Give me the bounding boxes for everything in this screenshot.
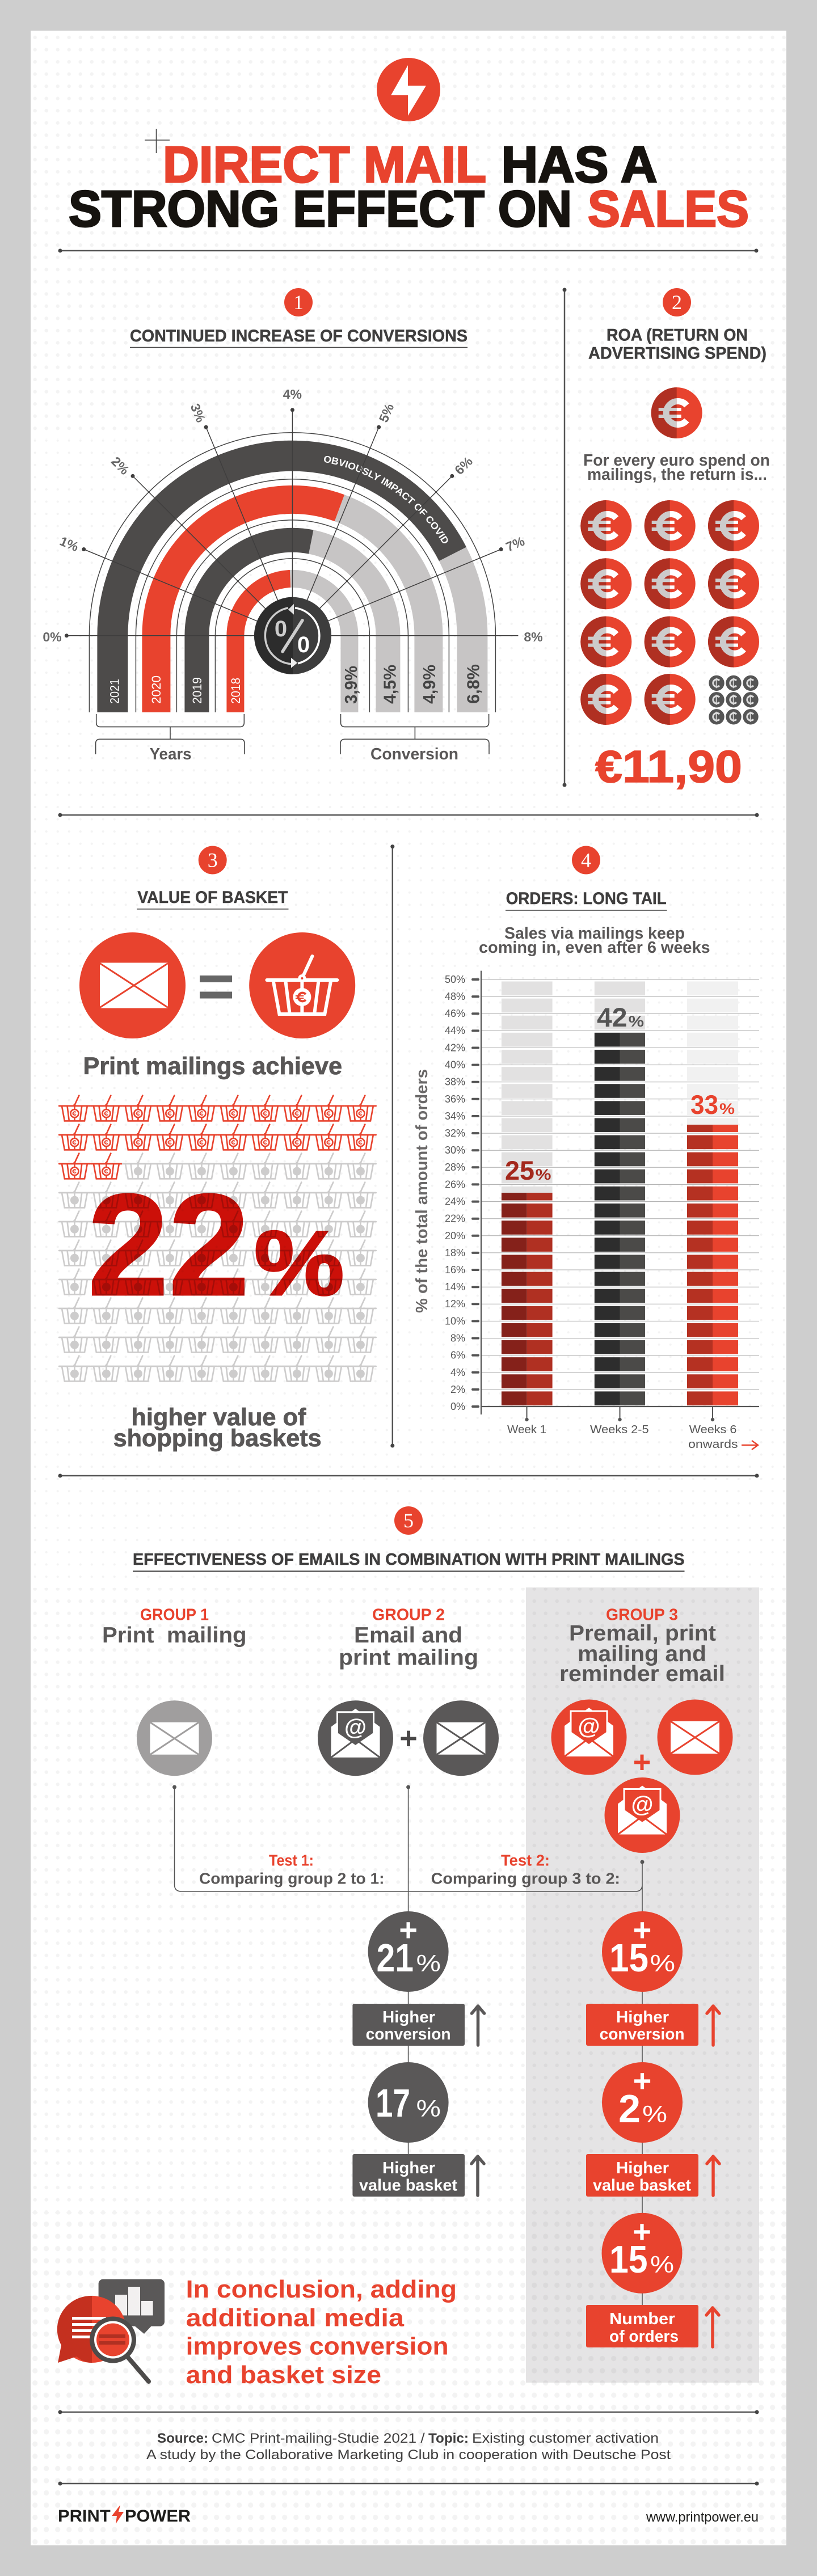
source text: A study by the Collaborative Marketing Club in cooperation with Deutsche Post: [146, 2447, 671, 2463]
test 2 label: Comparing group 3 to 2:: [431, 1870, 620, 1887]
y axis labels: 32%: [445, 1127, 465, 1139]
badge 1: [284, 288, 313, 316]
badge 4: 4: [581, 848, 591, 871]
y axis labels: 48%: [445, 991, 465, 1002]
box: higher value basket: Higher: [382, 2159, 435, 2177]
axes: [481, 971, 759, 1414]
y axis labels: 26%: [445, 1179, 465, 1190]
badge 5: 5: [403, 1509, 414, 1532]
heading: ROA: ROA (RETURN ON: [607, 326, 748, 345]
value label: 42%: %: [629, 1013, 644, 1030]
source text: Existing customer activation: [472, 2431, 659, 2446]
box: higher conversion: [586, 2004, 698, 2046]
conversion values: 3,9%: [341, 666, 361, 704]
test 2 label: [431, 1851, 620, 1887]
y axis labels: 38%: [445, 1076, 465, 1088]
title: print mailing: [339, 1646, 478, 1670]
source text: [146, 2431, 671, 2463]
year labels: 2021: [108, 679, 122, 704]
y axis labels: 18%: [445, 1247, 465, 1259]
logo: print power: POWER: [125, 2507, 191, 2526]
chart: bar chart: [445, 971, 759, 1451]
group 3: [551, 1606, 733, 1853]
value: 22 percent: 22: [88, 1164, 250, 1326]
y axis labels: 28%: [445, 1162, 465, 1173]
text: sales via mailings: Sales via mailings keep: [504, 924, 685, 943]
panel: section 3 value of basket: [59, 846, 376, 1452]
value label: 25%: [505, 1155, 551, 1185]
box: number of orders: [586, 2305, 698, 2347]
y axis labels: 46%: [445, 1008, 465, 1019]
year labels: 2018: [229, 678, 243, 704]
band 2018: [235, 578, 290, 712]
badge 4: [572, 846, 600, 875]
box: higher value basket: value basket: [593, 2177, 691, 2195]
box: number of orders: of orders: [609, 2328, 679, 2346]
curved covid note: OBVIOUSLY IMPACT OF COVID: [324, 456, 448, 543]
url: www.printpower.eu: [646, 2510, 759, 2525]
bar: week 1 25%: [502, 1193, 553, 1407]
result: plus 21%: 21: [377, 1936, 414, 1980]
arrow up: [472, 2006, 485, 2045]
value: 22 percent: %: [254, 1212, 344, 1315]
title: Email and: [354, 1623, 462, 1648]
bracket: conversion: [340, 714, 489, 763]
title: DIRECT MAIL: [163, 137, 486, 193]
result: 17%: %: [416, 2095, 441, 2122]
text: sales via mailings: [479, 924, 710, 957]
percent scale labels: 1%: [58, 534, 81, 554]
y axis labels: 24%: [445, 1196, 465, 1207]
band 2019: [197, 540, 311, 712]
percent scale labels: 6%: [452, 454, 475, 478]
heading: ROA: ADVERTISING SPEND): [588, 344, 767, 363]
hub icon: percent cycle: 0: [297, 632, 310, 657]
arrow: onwards: [742, 1441, 758, 1450]
title: [69, 137, 749, 238]
x labels: Week 1: [507, 1424, 546, 1436]
x labels: Weeks 6: [689, 1424, 736, 1436]
y axis labels: 4%: [450, 1367, 465, 1378]
label: GROUP 1: [140, 1606, 209, 1624]
box: higher conversion: Higher: [616, 2008, 669, 2026]
icon: print mail: [657, 1699, 733, 1775]
y axis labels: 36%: [445, 1093, 465, 1105]
icon: conclusion chat and magnifier: [57, 2279, 165, 2381]
divider: [58, 248, 758, 253]
result: plus 2%: 2: [618, 2087, 641, 2131]
text: every euro: [583, 451, 770, 484]
test 1 label: Comparing group 2 to 1:: [199, 1870, 385, 1887]
percent scale labels: 8%: [524, 630, 543, 644]
box: higher conversion: conversion: [600, 2025, 685, 2043]
hub icon: percent cycle: [254, 597, 331, 674]
heading: value of basket: VALUE OF BASKET: [137, 888, 288, 907]
result: plus 21%: [368, 1911, 449, 1992]
panel: section 4 orders long tail: [413, 846, 759, 1451]
badge 2: [663, 288, 691, 316]
y axis labels: 34%: [445, 1110, 465, 1122]
divider: [58, 2410, 759, 2414]
result: plus 15% orders: %: [650, 2251, 674, 2278]
text: higher value: shopping baskets: [113, 1425, 322, 1452]
badge 5: [394, 1506, 423, 1535]
title: mailing and: [578, 1642, 706, 1666]
title: Print mailing: [102, 1623, 247, 1648]
label: GROUP 3: [606, 1606, 678, 1624]
conversion values: 4,5%: [380, 665, 399, 704]
source text: Topic:: [428, 2431, 469, 2446]
box: higher value basket: [352, 2154, 465, 2197]
value label: 25%: 25: [505, 1155, 534, 1185]
title: [559, 1621, 725, 1686]
vertical divider 1: [563, 288, 566, 787]
bracket: years: Years: [150, 745, 192, 763]
title: [339, 1623, 478, 1670]
y axis labels: 44%: [445, 1025, 465, 1036]
icon grid: 100 baskets, 22 highlighted: [59, 1096, 376, 1381]
x ticks: [525, 1407, 714, 1421]
value label: 42%: [597, 1002, 644, 1032]
result: plus 15%: %: [650, 1950, 675, 1977]
result: plus 21%: %: [416, 1950, 441, 1977]
bar: weeks 2-5 42%: [595, 1031, 645, 1407]
x labels: [507, 1424, 738, 1451]
icon: envelope circle: [79, 932, 186, 1038]
y axis labels: 20%: [445, 1230, 465, 1241]
result: plus 2%: %: [642, 2101, 667, 2127]
bars: [502, 979, 738, 1407]
source text: CMC Print-mailing-Studie 2021 /: [212, 2431, 425, 2446]
y axis labels: 10%: [445, 1316, 465, 1327]
icon: print mail: [137, 1700, 212, 1776]
conclusion text: improves conversion: [186, 2333, 449, 2360]
year labels: [108, 675, 243, 704]
conversion values: 4,9%: [419, 665, 439, 704]
result: plus 15% orders: 15: [609, 2238, 648, 2281]
panel: group 3 background: [526, 1587, 759, 2383]
arrow up: [707, 2006, 719, 2045]
y axis labels: 12%: [445, 1298, 465, 1310]
divider: [58, 2482, 759, 2485]
icon grid: 9 cent coins: [709, 675, 759, 725]
title: Premail, print: [569, 1621, 716, 1646]
divider: [58, 1473, 759, 1478]
band 2021: [112, 456, 453, 712]
title: STRONG EFFECT ON: [69, 181, 572, 238]
panel: section 1 conversions gauge: [43, 288, 543, 763]
y axis labels: 8%: [450, 1333, 465, 1344]
axis title: % of the total amount of orders: [413, 1069, 431, 1313]
y axis labels: 30%: [445, 1145, 465, 1156]
year labels: 2019: [190, 677, 204, 704]
plus: +: [399, 1721, 418, 1755]
y axis labels: [445, 974, 465, 1412]
divider: [58, 813, 759, 817]
x labels: onwards: [688, 1438, 738, 1451]
result: plus 15% orders: +: [633, 2214, 651, 2249]
spokes: [65, 408, 518, 637]
value label: 42%: 42: [597, 1002, 628, 1032]
plus: +: [633, 1745, 651, 1779]
percent scale labels: [43, 387, 543, 644]
box: higher value basket: Higher: [616, 2159, 669, 2177]
heading: orders: ORDERS: LONG TAIL: [506, 889, 667, 908]
icon: print mail: [423, 1700, 499, 1776]
logo: print power: [58, 2505, 191, 2526]
text: every euro: mailings, the return is...: [587, 466, 767, 484]
panel: section 2 ROA: [580, 288, 770, 792]
percent scale labels: 2%: [108, 454, 132, 478]
result: plus 15%: 15: [609, 1936, 648, 1980]
icon: basket circle: [249, 932, 355, 1038]
box: number of orders: Number: [609, 2310, 675, 2328]
test 1 label: Test 1:: [269, 1851, 314, 1869]
icon: reminder email: [605, 1777, 680, 1853]
title: SALES: [588, 181, 749, 238]
y axis labels: 14%: [445, 1281, 465, 1293]
text: higher value: [113, 1404, 322, 1452]
y axis labels: 40%: [445, 1059, 465, 1071]
icon: email: [318, 1700, 393, 1776]
percent scale labels: 5%: [376, 402, 397, 424]
result: 17%: [368, 2062, 449, 2143]
title: reminder email: [559, 1662, 725, 1686]
value label: 33%: [690, 1089, 735, 1120]
bracket: years: [96, 714, 245, 763]
grey remainder bands: [290, 508, 472, 712]
box: higher value basket: [586, 2154, 698, 2197]
result: plus 15% orders: [601, 2213, 682, 2294]
value: 22 percent: [88, 1164, 344, 1326]
value label: 25%: %: [536, 1166, 551, 1183]
icon grid: 11 euro coins: [580, 500, 759, 725]
y axis labels: 42%: [445, 1042, 465, 1054]
bar: weeks 6 onwards 33%: [687, 1125, 738, 1407]
arrow up: [706, 2308, 719, 2347]
x labels: Weeks 2-5: [590, 1424, 649, 1436]
heading: effectiveness: EFFECTIVENESS OF EMAILS IN COMBINATION WITH PRINT MAILINGS: [133, 1551, 684, 1569]
badge 3: [199, 846, 227, 875]
box: higher conversion: [352, 2004, 465, 2046]
value label: 33%: 33: [690, 1089, 718, 1120]
conclusion text: and basket size: [186, 2361, 381, 2389]
connector lines: [172, 1785, 645, 2305]
test 1 label: [199, 1851, 385, 1887]
badge 1: 1: [293, 291, 304, 314]
icon: premail: [551, 1699, 626, 1775]
badge 3: 3: [208, 848, 218, 871]
vertical divider 2: [390, 844, 394, 1447]
percent scale labels: 4%: [283, 387, 302, 402]
box: higher value basket: value basket: [359, 2177, 457, 2195]
y axis labels: 2%: [450, 1384, 465, 1395]
y axis labels: 16%: [445, 1264, 465, 1276]
conclusion text: [186, 2275, 457, 2389]
result: plus 15%: +: [633, 1912, 651, 1948]
source text: Source:: [157, 2431, 208, 2446]
result: 17%: 17: [376, 2081, 410, 2125]
icon: lightning bolt badge: [377, 58, 440, 121]
result: plus 2%: +: [633, 2063, 651, 2098]
text: every euro: For every euro spend on: [583, 451, 770, 470]
conversion values: 6,8%: [464, 664, 483, 704]
y axis labels: 0%: [450, 1401, 465, 1412]
y axis labels: 6%: [450, 1350, 465, 1361]
chart: semicircular gauge: [43, 387, 543, 763]
heading: continued increase: CONTINUED INCREASE OF CONVERSIONS: [130, 327, 468, 345]
grid lines: [481, 979, 759, 1390]
arrow up: [471, 2156, 484, 2195]
title: HAS A: [502, 137, 657, 193]
y axis labels: 22%: [445, 1213, 465, 1224]
badge 2: 2: [672, 291, 682, 314]
y axis labels: 50%: [445, 974, 465, 985]
text: sales via mailings: coming in, even after 6 weeks: [479, 939, 710, 957]
y tick marks: [473, 979, 478, 1407]
test 2 label: Test 2:: [501, 1851, 550, 1869]
conclusion text: additional media: [186, 2304, 405, 2332]
result: plus 21%: +: [399, 1912, 418, 1948]
hub icon: percent cycle: 0: [275, 616, 287, 641]
arrow up: [707, 2156, 719, 2195]
band 2020: [156, 500, 339, 712]
percent scale labels: 3%: [188, 402, 208, 424]
year labels: 2020: [149, 675, 163, 704]
result: plus 15%: [602, 1911, 683, 1992]
group 2: [318, 1606, 499, 1776]
result: plus 2%: [602, 2062, 683, 2143]
text: higher value: higher value of: [131, 1404, 306, 1431]
logo: print power: PRINT: [58, 2507, 111, 2526]
box: higher conversion: conversion: [366, 2025, 451, 2043]
panel: section 5 email and print: [57, 1506, 759, 2389]
heading: ROA: [588, 326, 767, 363]
percent scale labels: 7%: [504, 534, 527, 554]
conclusion text: In conclusion, adding: [186, 2275, 457, 2303]
percent scale labels: 0%: [43, 630, 62, 644]
group 1: [102, 1606, 247, 1776]
equals sign: [200, 975, 232, 998]
icon: single euro coin: [651, 387, 702, 438]
crosshair mark: [145, 129, 170, 153]
value: 11,90: €11,90: [595, 741, 742, 792]
label: GROUP 2: [372, 1606, 445, 1624]
conversion values: [341, 664, 483, 704]
text: print mailings achieve: Print mailings achieve: [83, 1053, 342, 1080]
gauge outline arcs: [89, 433, 495, 712]
box: higher conversion: Higher: [382, 2008, 435, 2026]
bracket: conversion: Conversion: [370, 745, 458, 763]
value label: 33%: %: [719, 1100, 735, 1117]
